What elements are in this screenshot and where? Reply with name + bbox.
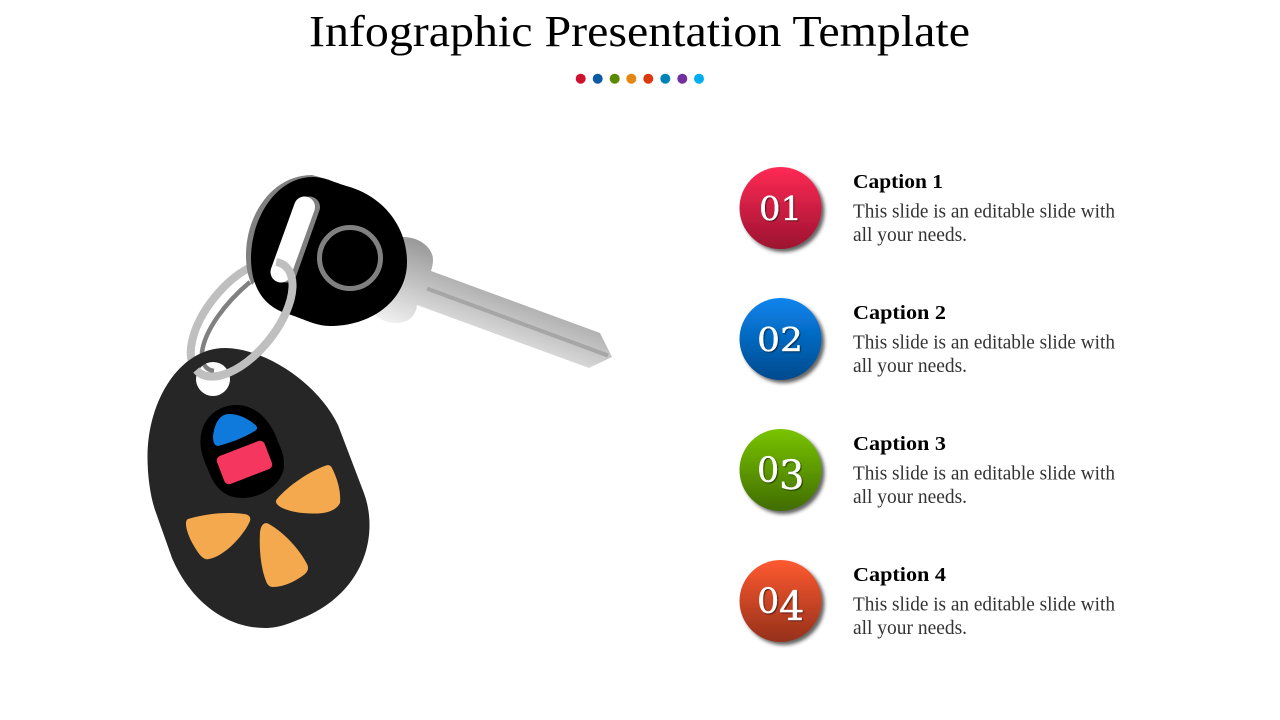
item 3 xyxy=(740,429,1115,511)
remote fob body xyxy=(148,348,370,628)
key head xyxy=(246,175,407,326)
description 4: all your needs. xyxy=(853,617,967,639)
badge 03 xyxy=(740,429,822,511)
badge 01 xyxy=(740,167,822,249)
description 1: all your needs. xyxy=(853,224,967,246)
badge 03: 0 xyxy=(757,451,779,491)
illustration: car key and remote fob xyxy=(148,175,612,628)
description 3: This slide is an editable slide with xyxy=(853,462,1115,484)
description 3: all your needs. xyxy=(853,486,967,508)
caption 4: Caption 4 xyxy=(853,565,946,586)
badge 02 xyxy=(740,298,822,380)
badge 02: 02 xyxy=(757,320,803,359)
item 2 xyxy=(740,298,1115,380)
item 1 xyxy=(740,167,1115,249)
title: Infographic Presentation Template xyxy=(309,7,970,56)
caption 1: Caption 1 xyxy=(853,172,943,193)
badge 01: 01 xyxy=(759,189,802,228)
remote button cluster xyxy=(200,405,284,498)
orange buttons xyxy=(186,465,340,587)
caption 3: Caption 3 xyxy=(853,434,946,455)
badge 03: 3 xyxy=(779,453,804,499)
key ring front xyxy=(196,262,293,377)
badge 04 xyxy=(740,560,822,642)
badge 04: 4 xyxy=(779,584,804,630)
badge 04: 0 xyxy=(757,582,779,622)
item 4 xyxy=(740,560,1115,642)
key blade xyxy=(360,237,612,368)
description 2: This slide is an editable slide with xyxy=(853,332,1115,354)
description 4: This slide is an editable slide with xyxy=(853,594,1115,616)
description 1: This slide is an editable slide with xyxy=(853,200,1115,222)
caption 2: Caption 2 xyxy=(853,303,946,324)
decorative colour dots xyxy=(576,74,704,84)
description 2: all your needs. xyxy=(853,355,967,377)
key ring back xyxy=(172,244,311,394)
